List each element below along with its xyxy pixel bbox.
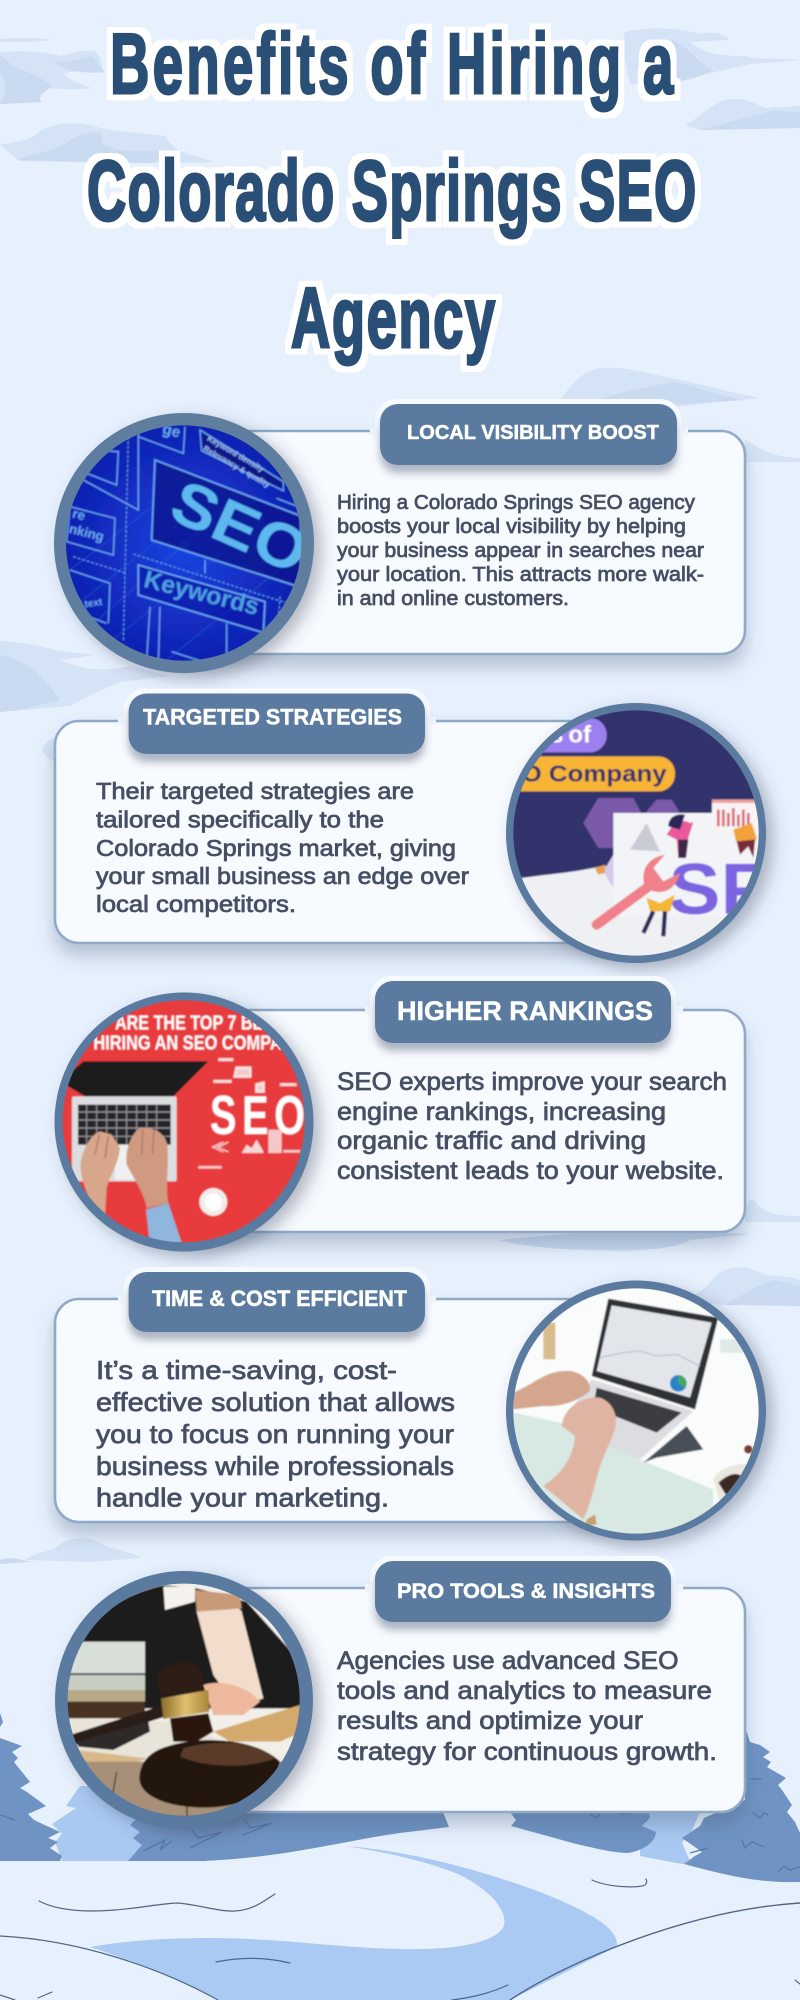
photo: SEO company illustration: s [550, 721, 563, 748]
body text: Colorado Springs market, giving [96, 835, 456, 861]
body text: effective solution that allows [96, 1387, 455, 1417]
panel: targeted strategies [55, 688, 770, 968]
heading pill [124, 688, 430, 759]
photo: laptop on red desk: HIRING AN SEO COMPA [93, 1032, 282, 1055]
photo: SEO company illustration [500, 698, 770, 968]
title: Benefits of Hiring a [110, 17, 674, 112]
tree scribbles [0, 1779, 800, 1872]
heading pill: LOCAL VISIBILITY BOOST [407, 422, 659, 444]
photo: SEO keywords screen: nking [68, 521, 106, 544]
title [87, 17, 696, 366]
card [190, 431, 745, 654]
body text: your location. This attracts more walk- [337, 563, 704, 586]
card [55, 1299, 645, 1522]
tree group: centre right [500, 1808, 656, 1853]
body text: tailored specifically to the [96, 806, 384, 832]
tree group: middle [128, 1800, 449, 1861]
title: Agency [291, 271, 495, 366]
heading pill: TIME & COST EFFICIENT [152, 1286, 408, 1311]
photo: SEO company illustration: of [568, 721, 592, 748]
heading pill [370, 1556, 676, 1627]
background clouds [0, 28, 800, 1564]
panel: pro tools and insights [50, 1556, 745, 1835]
photo: SEO company illustration: O Company [522, 760, 667, 786]
body text [337, 491, 704, 610]
body text: handle your marketing. [96, 1482, 389, 1512]
photo: laptop on red desk: SEO [210, 1086, 305, 1147]
card [190, 1010, 745, 1232]
panel: local visibility boost [50, 399, 745, 680]
body text: SEO experts improve your search [337, 1068, 727, 1096]
body text: strategy for continuous growth. [337, 1738, 717, 1766]
photo: SEO keywords screen: text [84, 597, 104, 610]
body text: It’s a time-saving, cost- [96, 1355, 397, 1385]
photo: SEO keywords screen: Keyword density [206, 434, 266, 474]
trees: light [52, 1786, 700, 1866]
card [55, 721, 645, 943]
heading pill [124, 1267, 430, 1337]
body text [96, 778, 469, 917]
photo: laptop on red desk: ARE THE TOP 7 BE [115, 1012, 263, 1035]
heading pill: TARGETED STRATEGIES [143, 704, 402, 730]
body text: Agencies use advanced SEO [337, 1647, 678, 1675]
photo: SEO keywords screen: Keywords [141, 566, 262, 621]
body text: business while professionals [96, 1451, 454, 1481]
title: Colorado Springs SEO [87, 144, 696, 239]
photo: hands on laptop with analytics [500, 1276, 770, 1546]
body text: organic traffic and driving [337, 1127, 646, 1155]
body text: you to focus on running your [96, 1419, 454, 1449]
winding path [90, 1846, 617, 2000]
heading pill [375, 399, 682, 470]
heading pill: PRO TOOLS & INSIGHTS [397, 1580, 655, 1603]
panel: time and cost efficient [55, 1267, 770, 1546]
body text: your business appear in searches near [337, 539, 704, 562]
body text: Their targeted strategies are [96, 778, 414, 804]
photo: laptop on red desk [50, 988, 320, 1258]
photo: SEO keywords screen: ge [161, 421, 182, 442]
heading pill: HIGHER RANKINGS [397, 996, 653, 1026]
body text: consistent leads to your website. [337, 1157, 724, 1185]
body text: results and optimize your [337, 1707, 643, 1735]
body text: tools and analytics to measure [337, 1677, 712, 1705]
photo: SEO keywords screen: re [71, 506, 87, 523]
tree: far left [0, 1713, 62, 1861]
photo: SEO keywords screen [50, 410, 320, 680]
winter landscape [0, 1713, 800, 2000]
body text: Hiring a Colorado Springs SEO agency [337, 491, 696, 514]
photo: judge gavel [50, 1565, 320, 1835]
snowy ground [0, 1827, 800, 2000]
photo: SEO keywords screen: Relevancy & quality [202, 444, 272, 490]
card [190, 1588, 745, 1812]
panel: higher rankings [50, 976, 745, 1258]
body text: local competitors. [96, 891, 296, 917]
body text [96, 1355, 455, 1512]
body text [337, 1068, 727, 1185]
body text: engine rankings, increasing [337, 1098, 666, 1126]
body text: your small business an edge over [96, 863, 469, 889]
heading pill [370, 976, 676, 1048]
photo: SEO company illustration: SF [668, 849, 768, 930]
photo: SEO keywords screen: SEO [161, 467, 318, 588]
body text: in and online customers. [337, 587, 569, 610]
ground contour lines [0, 1879, 800, 2000]
tree: far right [682, 1730, 800, 1882]
body text [337, 1647, 717, 1766]
body text: boosts your local visibility by helping [337, 515, 686, 538]
